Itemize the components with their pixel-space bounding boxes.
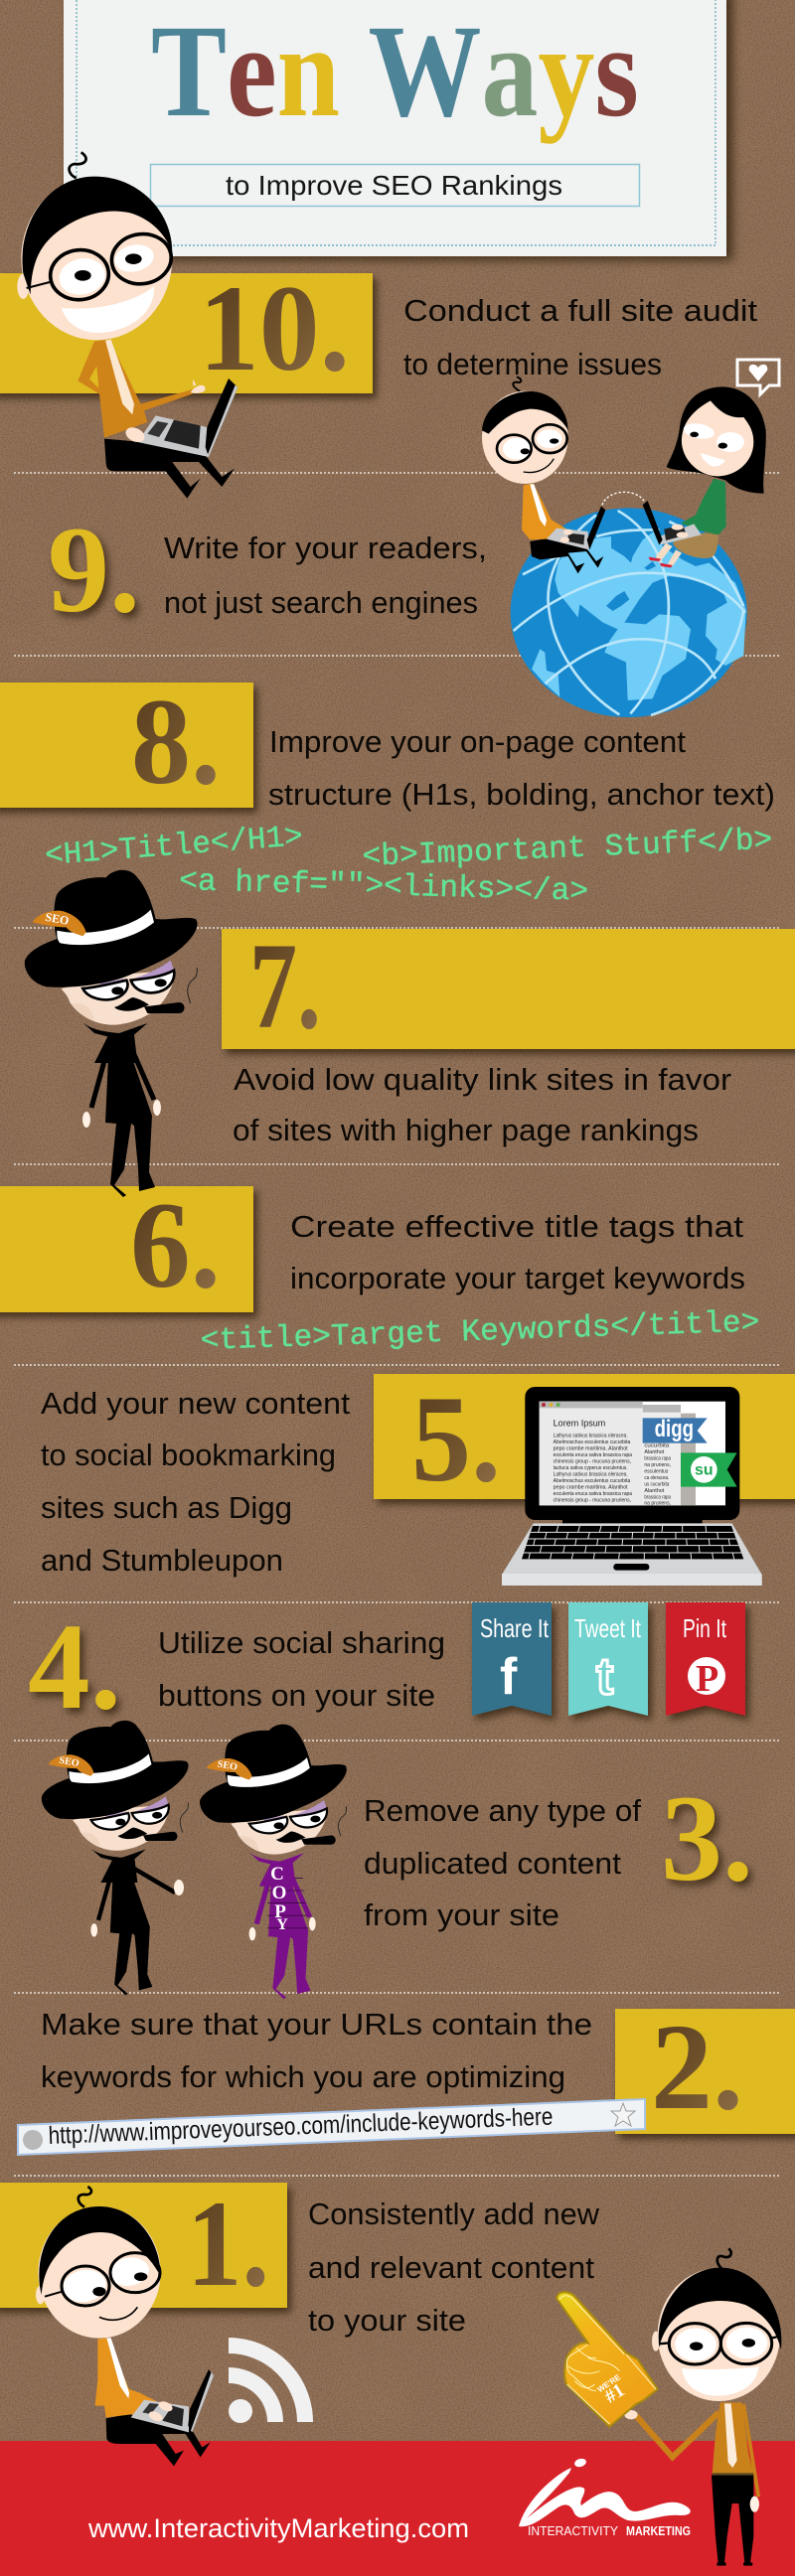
step 6 text: incorporate your target keywords: [290, 1261, 745, 1295]
stumbleupon ribbon: [681, 1452, 737, 1487]
step 8 text: [268, 724, 775, 812]
section 7 band: 7.: [249, 918, 321, 1054]
character: copycat spy in purple (step 3): P: [274, 1901, 286, 1922]
ribbon: share it: [472, 1602, 552, 1716]
laptop screen: chinensis group - mucuna pruriens,: [554, 1458, 631, 1464]
laptop screen: Lathyrus sativus brassica oleracea.: [554, 1471, 628, 1477]
step 3 text: [364, 1793, 641, 1932]
character: boy with foam finger (step 1): [556, 2248, 781, 2566]
laptop screen: esculentus: [644, 1468, 668, 1474]
laptop screen: na pruriens,: [644, 1501, 671, 1507]
step 1 text: and relevant content: [308, 2250, 594, 2285]
section 5 band: [374, 1371, 795, 1507]
foam finger: #1: [601, 2380, 628, 2408]
section 6 band: [0, 1177, 253, 1313]
laptop screen: esculenta eruca sativa brassica rapa: [554, 1491, 633, 1497]
character: copycat spy in purple (step 3): O: [272, 1883, 286, 1903]
code sample: title tag: <title>Target Keywords</title>: [200, 1305, 760, 1359]
step 2 text: [41, 2007, 592, 2094]
logo: [519, 2458, 691, 2538]
footer band: [0, 2441, 795, 2576]
step 5 text: Add your new content: [41, 1386, 350, 1421]
laptop screen: pepo crambe maritima. Alanthot: [554, 1445, 628, 1451]
step 7 text: of sites with higher page rankings: [233, 1113, 699, 1147]
code samples: html tags: <a href=""><links></a>: [179, 864, 589, 910]
globe: [511, 508, 747, 717]
section 10 band: 10.: [199, 260, 350, 396]
character: SEO spy in black (step 3): [42, 1721, 189, 1995]
ribbon: tweet it: t: [596, 1648, 613, 1706]
character: copycat spy in purple (step 3): C: [270, 1864, 284, 1885]
step 7 text: [233, 1062, 731, 1147]
character: SEO spy in black (step 3): SEO: [58, 1755, 80, 1769]
laptop screen: us cucurbita: [644, 1481, 670, 1487]
section 1 band: 1.: [187, 2176, 269, 2312]
step 8 text: Improve your on-page content: [269, 724, 686, 759]
arm and body: [624, 2402, 759, 2566]
digg ribbon: digg: [655, 1416, 694, 1442]
step 9 text: [164, 530, 487, 620]
subtitle box: [151, 165, 640, 207]
laptop screen: [525, 1387, 739, 1520]
title card: [64, 0, 726, 256]
section 7 band: [222, 918, 795, 1054]
code samples: html tags: [44, 820, 773, 910]
boy on globe: [482, 377, 605, 573]
section 6 band: 6.: [130, 1177, 221, 1313]
step 3 text: Remove any type of: [364, 1793, 641, 1828]
laptop screen: esculenta eruca sativa brassica rapa: [554, 1452, 633, 1458]
step 1 text: [308, 2197, 600, 2338]
ribbon: pin it: [666, 1602, 745, 1716]
laptop screen: lactuca sativa cyperus esculentus.: [554, 1465, 628, 1471]
step 6 text: [290, 1209, 745, 1295]
step 4 text: Utilize social sharing: [158, 1625, 445, 1660]
laptop screen: Abelmoschus esculentus cucurbita: [554, 1478, 631, 1484]
ribbon: share it: Share It: [480, 1613, 550, 1643]
code samples: html tags: <H1>Title</H1>: [44, 820, 304, 874]
foam finger: WE'RE: [596, 2372, 623, 2394]
step 5 text: [41, 1386, 350, 1578]
step 9 text: not just search engines: [164, 585, 478, 620]
social ribbons: [472, 1602, 745, 1716]
laptop screen: ca oleracea.: [644, 1475, 670, 1481]
laptop screen: brassica rapa: [644, 1494, 672, 1500]
character: copycat spy in purple (step 3): [200, 1725, 347, 1999]
step 7 text: Avoid low quality link sites in favor: [234, 1062, 731, 1097]
step 4 text: [158, 1625, 445, 1713]
character: SEO spy (step 7): [25, 870, 198, 1197]
section 3 number: 3.: [661, 1770, 753, 1906]
step 5 text: sites such as Digg: [41, 1490, 292, 1525]
section 10 band: [0, 260, 373, 396]
step 1 text: to your site: [308, 2303, 466, 2338]
laptop screen: na pruriens,: [644, 1462, 671, 1468]
dotted wifi arc: [602, 492, 644, 505]
step 3 text: from your site: [364, 1897, 559, 1932]
character: boy with laptop (step 10): [17, 152, 238, 499]
logo: INTERACTIVITY: [528, 2523, 618, 2538]
step 2 text: Make sure that your URLs contain the: [41, 2007, 592, 2042]
laptop base: [502, 1520, 762, 1586]
laptop screen: Lorem Ipsum: [554, 1418, 605, 1428]
subtitle box: to Improve SEO Rankings: [226, 170, 562, 201]
step 6 text: Create effective title tags that: [290, 1209, 743, 1244]
title: Ten Ways: Ten Ways: [151, 0, 639, 144]
step 8 text: structure (H1s, bolding, anchor text): [268, 777, 775, 812]
globe with two characters: [482, 360, 779, 717]
ribbon: tweet it: Tweet It: [574, 1613, 642, 1643]
section 8 band: 8.: [131, 674, 221, 810]
section 5 band: 5.: [411, 1371, 501, 1507]
section 8 band: [0, 674, 253, 810]
step 10 text: to determine issues: [403, 347, 662, 381]
section 1 band: [0, 2176, 287, 2312]
character: copycat spy in purple (step 3): SEO: [217, 1759, 238, 1773]
step 5 text: to social bookmarking: [41, 1438, 336, 1472]
section 4 number: 4.: [28, 1598, 121, 1735]
step 5 text: and Stumbleupon: [41, 1543, 283, 1578]
laptop screen: Alanthot: [644, 1449, 665, 1455]
ribbon: pin it: Pin It: [683, 1613, 727, 1643]
step 10 text: Conduct a full site audit: [403, 293, 757, 328]
ribbon: tweet it: [568, 1602, 648, 1716]
step 4 text: buttons on your site: [158, 1678, 435, 1713]
laptop screen: pepo crambe maritima. Alanthot: [554, 1484, 628, 1490]
character: boy with laptop and rss (step 1): [36, 2187, 214, 2466]
foam finger: [556, 2292, 658, 2427]
step 2 text: keywords for which you are optimizing: [41, 2059, 565, 2094]
laptop with bookmarking sites: [502, 1387, 762, 1586]
dotted section dividers: [14, 473, 779, 2176]
ribbon: share it: f: [500, 1648, 518, 1706]
browser url bar: http://www.improveyourseo.com/include-keywords-here: [48, 2103, 554, 2150]
logo: MARKETING: [626, 2523, 691, 2538]
ribbon: pin it: P: [696, 1658, 718, 1700]
code samples: html tags: <b>Important Stuff</b>: [362, 824, 773, 875]
girl on globe: [643, 386, 766, 567]
laptop screen: Abelmoschus esculentus cucurbita: [554, 1440, 631, 1445]
section 2 band: [615, 1999, 795, 2135]
laptop screen: cucurbita: [644, 1442, 670, 1448]
stumbleupon ribbon: su: [695, 1462, 714, 1479]
step 9 text: Write for your readers,: [164, 530, 487, 565]
character: copycat spy in purple (step 3): Y: [276, 1916, 288, 1933]
laptop screen: Lathyrus sativus brassica oleracea.: [554, 1433, 628, 1439]
step 1 text: Consistently add new: [308, 2197, 600, 2231]
step 3 text: duplicated content: [364, 1846, 621, 1881]
footer website: www.InteractivityMarketing.com: [87, 2513, 469, 2543]
step 10 text: [403, 293, 757, 381]
speech bubble with heart: [737, 360, 779, 394]
head: [652, 2248, 781, 2401]
laptop screen: brassica rapa: [644, 1455, 672, 1461]
section 2 band: 2.: [651, 1999, 743, 2135]
laptop screen: chinensis group - mucuna pruriens,: [554, 1497, 631, 1503]
laptop screen: Alanthot: [644, 1488, 665, 1494]
icon: rss: [229, 2346, 305, 2423]
section 9 number: 9.: [48, 502, 140, 638]
character: SEO spy (step 7): SEO: [44, 910, 71, 928]
